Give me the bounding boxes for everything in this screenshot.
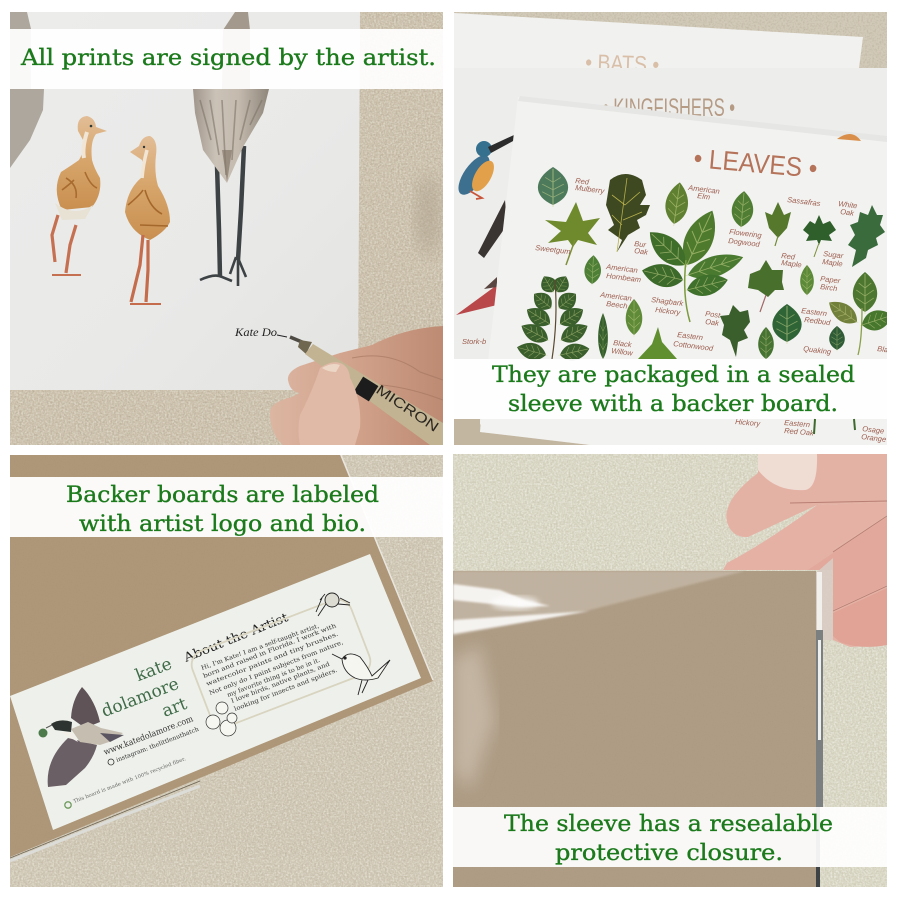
panel: backer board label [10, 455, 443, 887]
linen bottom corner [454, 419, 590, 445]
Micron pen: MICRON [373, 381, 442, 435]
bio text: looking for insects and spiders. [233, 667, 338, 713]
hand holding pen [270, 326, 443, 445]
leaf labels: Post [705, 309, 722, 320]
icon: nuthatch with clover [38, 687, 124, 787]
leaf labels: Paper [820, 274, 841, 285]
leaf labels: Hickory [655, 305, 682, 317]
chick left [52, 116, 107, 275]
website and social [65, 714, 200, 808]
about the artist heading: About the Artist [180, 609, 290, 665]
website and social: instagram: thelittlenuthatch [115, 726, 200, 764]
website and social: www.katedolamore.com [102, 714, 195, 758]
kingfisher bird [453, 135, 515, 200]
leaf labels: Dogwood [728, 236, 761, 249]
icon: wren [332, 654, 390, 695]
partial birds [456, 200, 507, 346]
bio text: my favorite thing is to be in it. [226, 657, 321, 699]
leaf labels: Elm [697, 191, 711, 202]
bio text: born and raised in Florida. I work with [202, 622, 337, 680]
white artist label [10, 554, 421, 830]
leaf labels: Mulberry [575, 183, 606, 196]
bio text [200, 622, 344, 713]
panel: sealed sleeve stack [453, 12, 895, 445]
sleeve plastic sheen [453, 571, 745, 790]
leaf labels: Flowering [729, 227, 763, 240]
leaf labels: Sugar [823, 249, 844, 260]
artist logo text: dolamore [99, 674, 182, 722]
caption band: backer boards: Backer boards are labeled [66, 483, 379, 508]
crane body and legs [193, 89, 269, 286]
leaf labels below caption [735, 417, 887, 444]
leaf labels: Red [781, 251, 796, 262]
panel: signed print photo [10, 12, 443, 445]
leaf labels: Oak [634, 246, 650, 257]
sleeve closure edge [816, 558, 833, 887]
leaf labels below caption: Eastern [784, 418, 810, 429]
caption band: resealable: The sleeve has a resealable [504, 812, 833, 837]
leaf labels: Oak [840, 207, 856, 218]
bio text: I love birds, native plants, and [230, 661, 331, 705]
leaf labels: Black [613, 338, 633, 349]
leaf labels: Maple [822, 257, 843, 268]
icon: jumping spider [316, 593, 350, 616]
leaf labels: Sweetgum [535, 243, 571, 256]
sleeve: bats [454, 13, 863, 445]
leaf labels: Sassafras [787, 195, 821, 208]
thumb [298, 362, 360, 445]
linen background [454, 12, 887, 445]
partial birds: Stork-b [462, 337, 486, 346]
caption band: sealed sleeve: sleeve with a backer board. [508, 392, 838, 417]
fabric background [10, 12, 443, 445]
leaf labels: American [599, 290, 632, 303]
icon: flowers [206, 702, 237, 736]
sleeve: kingfishers [598, 68, 887, 142]
caption band: resealable [453, 807, 887, 867]
leaf labels: Maple [781, 258, 802, 269]
leaf labels: Shagbark [651, 295, 685, 308]
caption band: sealed sleeve: They are packaged in a sealed [492, 363, 855, 388]
signature: Kate Do [234, 325, 277, 339]
leaf illustrations [515, 167, 895, 363]
crane remnants [10, 12, 250, 168]
leaf labels below caption: Orange [861, 432, 887, 444]
leaf labels: Cottonwood [673, 339, 714, 353]
leaf labels below caption: Red Oak [784, 426, 815, 438]
caption band: sealed sleeve [454, 359, 887, 419]
leaf labels: American [605, 262, 638, 275]
hand with fingers [723, 454, 887, 647]
carpet background [10, 455, 443, 887]
caption band: backer boards: with artist logo and bio. [79, 512, 366, 537]
leaf labels: Eastern [677, 330, 704, 342]
leaf labels: American [687, 183, 720, 196]
art print sheet [10, 12, 360, 390]
Micron pen [290, 337, 443, 445]
leaf labels: White [838, 199, 858, 210]
artist logo text: kate [133, 654, 175, 686]
leaf labels: Eastern [801, 306, 828, 318]
artist logo text: art [159, 694, 190, 722]
sleeve: kingfishers: • KINGFISHERS • [603, 94, 735, 122]
fabric background [453, 454, 887, 887]
leaf labels: Willow [611, 346, 634, 358]
leaf labels: Beech [606, 299, 628, 311]
leaf labels [535, 176, 889, 358]
caption band: signed [10, 29, 443, 89]
caption band: resealable: protective closure. [555, 841, 783, 866]
leaf labels: Redbud [804, 315, 832, 327]
leaf labels: Bur [634, 239, 647, 249]
signature [234, 328, 288, 338]
panel: resealable closure [453, 454, 887, 887]
caption band: backer boards [10, 477, 443, 537]
kraft board in sleeve [453, 571, 816, 887]
bio text: watercolor paints and tiny brushes. [205, 631, 339, 688]
website and social: This board is made with 100% recycled fiber. [73, 756, 187, 805]
leaf labels: Quaking [803, 344, 832, 356]
leaf labels: Oak [705, 317, 721, 328]
caption band: signed: All prints are signed by the artist. [20, 46, 436, 71]
kraft board [10, 455, 433, 861]
leaf labels below caption: Osage [862, 424, 885, 436]
artist logo text [102, 661, 188, 716]
leaf labels: Hornbeam [606, 271, 642, 284]
bio text: Hi, I'm Kate! I am a self-taught artist, [200, 623, 320, 672]
chick right [125, 136, 170, 304]
leaf labels below caption: Hickory [735, 417, 762, 428]
sleeve: leaves: • LEAVES • [692, 143, 819, 184]
bio frame [187, 595, 375, 731]
sleeve: leaves [480, 96, 887, 445]
sleeve: bats: • BATS • [585, 49, 660, 78]
leaf labels: Red [575, 176, 590, 187]
leaf labels: Birch [820, 282, 838, 293]
bio text: Not only do I paint subjects from nature, [208, 639, 344, 697]
leaf labels: Bla [877, 344, 889, 354]
